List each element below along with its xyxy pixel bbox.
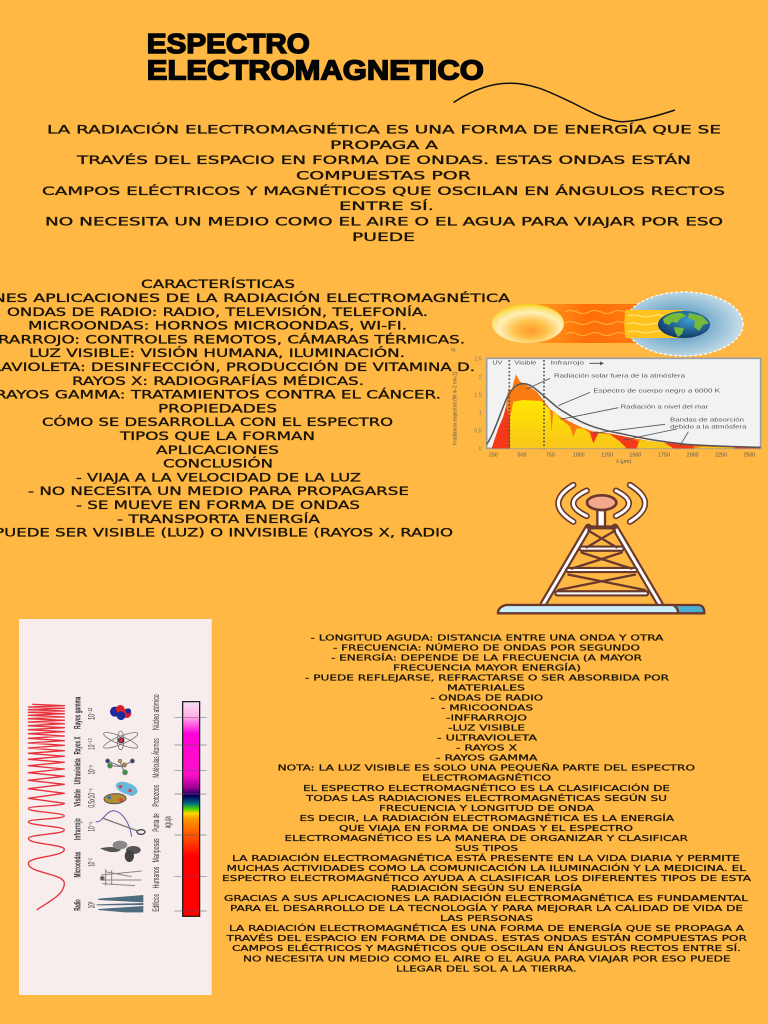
explanatory text block: QUE VIAJA EN FORMA DE ONDAS Y EL ESPECTRO	[339, 823, 633, 833]
decorative wave line under title	[454, 83, 675, 122]
explanatory text block: CAMPOS ELÉCTRICOS Y MAGNÉTICOS QUE OSCILAN EN ÁNGULOS RECTOS ENTRE SÍ.	[232, 942, 741, 953]
explanatory text block: MATERIALES	[447, 682, 525, 692]
explanatory text block: -LUZ VISIBLE	[448, 723, 525, 733]
wavelength values: 0,5x10⁻⁶	[86, 788, 96, 808]
explanatory text block: NOTA: LA LUZ VISIBLE ES SOLO UNA PEQUEÑA PARTE DEL ESPECTRO	[278, 763, 695, 773]
chart: solar irradiance spectrum: 1500	[629, 452, 641, 458]
chart: solar irradiance spectrum: 250	[489, 452, 498, 458]
intro text block	[42, 123, 725, 244]
chart: solar irradiance spectrum: 1	[479, 410, 482, 416]
icon: butterfly	[100, 841, 141, 862]
black body curve	[487, 384, 761, 447]
wavelength values: 10⁻¹²	[86, 708, 96, 720]
size comparison labels: Mariposas	[151, 838, 161, 862]
red absorption areas	[492, 407, 760, 448]
characteristics text block: RAYOS X: RADIOGRAFÍAS MÉDICAS.	[72, 373, 364, 388]
intro text block: PROPAGA A	[330, 139, 439, 152]
explanatory text block: TODAS LAS RADIACIONES ELECTROMAGNÉTICAS SEGÚN SU	[305, 792, 667, 803]
band names	[73, 696, 83, 911]
explanatory text block: - RAYOS X	[456, 743, 518, 753]
icon: needle tip	[96, 811, 145, 837]
chart: solar irradiance spectrum: λ (μm)	[616, 459, 631, 465]
size comparison labels: Átomos	[151, 738, 161, 755]
explanatory text block: - ENERGÍA: DEPENDE DE LA FRECUENCIA (A MAYOR	[331, 651, 642, 662]
base platform	[498, 605, 704, 613]
explanatory text block: LA RADIACIÓN ELECTROMAGNÉTICA ESTÁ PRESENTE EN LA VIDA DIARIA Y PERMITE	[232, 852, 740, 863]
explanatory text block: -INFRARROJO	[446, 713, 527, 723]
chart: solar irradiance spectrum: 1.5	[474, 392, 482, 398]
characteristics text block: RAYOS GAMMA: TRATAMIENTOS CONTRA EL CÁNCER.	[0, 387, 441, 402]
intro text block: ENTRE SÍ.	[339, 200, 434, 213]
size comparison labels: Edificios	[151, 894, 161, 912]
characteristics text block	[0, 276, 510, 540]
chart: solar irradiance spectrum: 1250	[601, 452, 613, 458]
chart: solar irradiance spectrum: 1000	[573, 452, 585, 458]
explanatory text block: - ULTRAVIOLETA	[437, 733, 538, 743]
intro text block: TRAVÉS DEL ESPACIO EN FORMA DE ONDAS. ESTAS ONDAS ESTÁN	[75, 154, 691, 167]
chart: solar irradiance spectrum: 750	[546, 452, 555, 458]
characteristics text block: PROPIEDADES	[158, 401, 277, 415]
characteristics text block: - NO NECESITA UN MEDIO PARA PROPAGARSE	[28, 484, 409, 498]
explanatory text block: ES DECIR, LA RADIACIÓN ELECTROMAGNÉTICA ES LA ENERGÍA	[300, 812, 675, 823]
icon: atom	[102, 730, 139, 751]
explanatory text block: - ONDAS DE RADIO	[430, 692, 543, 702]
intro text block: CAMPOS ELÉCTRICOS Y MAGNÉTICOS QUE OSCILAN EN ÁNGULOS RECTOS	[42, 185, 725, 198]
chart: solar irradiance spectrum: 1750	[658, 452, 670, 458]
explanatory text block: FRECUENCIA Y LONGITUD DE ONDA	[379, 803, 595, 813]
explanatory text block: PARA EL DESARROLLO DE LA TECNOLOGÍA Y PARA MEJORAR LA CALIDAD DE VIDA DE	[230, 902, 743, 913]
size comparison labels: Moléculas	[151, 756, 161, 778]
wavelength values: 10⁻⁵	[86, 822, 96, 832]
explanatory text block: - RAYOS GAMMA	[436, 753, 538, 763]
characteristics text block: LUZ VISIBLE: VISIÓN HUMANA, ILUMINACIÓN.	[29, 345, 405, 360]
outside atmosphere orange area	[492, 374, 761, 448]
explanatory text block: TRAVÉS DEL ESPACIO EN FORMA DE ONDAS. ESTAS ONDAS ESTÁN COMPUESTAS POR	[225, 932, 747, 943]
icon: humans	[100, 869, 142, 886]
chart: solar irradiance spectrum: Visible	[514, 360, 536, 366]
characteristics text block: CARACTERÍSTICAS	[141, 276, 295, 291]
wavelength values	[86, 708, 96, 908]
explanatory text block: ELECTROMAGNÉTICO	[422, 772, 551, 783]
explanatory text block: FRECUENCIA MAYOR ENERGÍA)	[393, 661, 581, 672]
explanatory text block: LLEGAR DEL SOL A LA TIERRA.	[396, 963, 576, 973]
intro text block: PUEDE	[352, 231, 415, 244]
intro text block: NO NECESITA UN MEDIO COMO EL AIRE O EL AGUA PARA VIAJAR POR ESO	[45, 216, 723, 229]
characteristics text block: APLICACIONES	[156, 443, 279, 457]
chart: solar irradiance spectrum: Espectro de cuerpo negro a 6000 K	[593, 388, 721, 394]
chart: solar irradiance spectrum: Irradiancia espectral (W m-2 nm-1)	[453, 371, 459, 445]
band names: Rayos gamma	[73, 696, 83, 729]
band names: Radio	[73, 899, 83, 911]
explanatory text block: ESPECTRO ELECTROMAGNÉTICO AYUDA A CLASIFICAR LOS DIFERENTES TIPOS DE ESTA	[222, 872, 752, 883]
chart: solar irradiance spectrum: debido a la atmósfera	[670, 424, 747, 430]
explanatory text block: SUS TIPOS	[455, 843, 518, 853]
chart: solar irradiance spectrum: 2250	[715, 452, 727, 458]
explanatory text block: - FRECUENCIA: NÚMERO DE ONDAS POR SEGUNDO	[333, 641, 640, 652]
size comparison labels: Protozoos	[151, 785, 161, 807]
chart: solar irradiance spectrum: UV	[492, 360, 503, 366]
chart: solar irradiance spectrum: 0.5	[474, 428, 482, 434]
explanatory text block: GRACIAS A SUS APLICACIONES LA RADIACIÓN ELECTROMAGNÉTICA ES FUNDAMENTAL	[224, 892, 749, 903]
explanatory text block: ELECTROMAGNÉTICO ES LA MANERA DE ORGANIZAR Y CLASIFICAR	[284, 832, 688, 843]
explanatory text block: NO NECESITA UN MEDIO COMO EL AIRE O EL AGUA PARA VIAJAR POR ESO PUEDE	[243, 953, 730, 963]
wavelength values: 10⁻²	[86, 858, 96, 867]
wavelength values: 10⁻⁸	[86, 765, 96, 774]
sea level yellow area	[510, 400, 733, 448]
chart: solar irradiance spectrum: 500	[518, 452, 526, 458]
characteristics text block: MICROONDAS: HORNOS MICROONDAS, WI-FI.	[28, 319, 407, 333]
chart: solar irradiance spectrum: 2.5	[474, 356, 482, 362]
intro text block: LA RADIACIÓN ELECTROMAGNÉTICA ES UNA FORMA DE ENERGÍA QUE SE	[47, 123, 721, 136]
colour scale bar	[174, 702, 207, 916]
chart: solar irradiance spectrum: 2500	[743, 452, 755, 458]
size comparison labels: Humanos	[151, 866, 161, 888]
explanatory text block: - MRICOONDAS	[441, 702, 533, 712]
explanatory text block: LA RADIACIÓN ELECTROMAGNÉTICA ES UNA FORMA DE ENERGÍA QUE SE PROPAGA A	[229, 922, 745, 933]
characteristics text block: - TRANSPORTA ENERGÍA	[117, 511, 320, 526]
icon: radio antenna tower	[498, 485, 704, 613]
explanatory text block: LAS PERSONAS	[440, 913, 533, 923]
intro text block: COMPUESTAS POR	[296, 170, 471, 183]
chart: solar irradiance spectrum: Radiación a nivel del mar	[621, 404, 709, 410]
explanatory text block: - LONGITUD AGUDA: DISTANCIA ENTRE UNA ONDA Y OTRA	[311, 632, 664, 642]
band names: Ultravioleta	[73, 758, 83, 784]
chart: solar irradiance spectrum	[451, 347, 761, 465]
wavelength values: 10³	[86, 902, 96, 908]
characteristics text block: TIPOS QUE LA FORMAN	[119, 429, 315, 443]
explanatory text block: MUCHAS ACTIVIDADES COMO LA COMUNICACIÓN LA ILUMINACIÓN Y LA MEDICINA. EL	[226, 862, 747, 873]
explanatory text block	[222, 632, 752, 973]
characteristics text block: CÓMO SE DESARROLLA CON EL ESPECTRO	[42, 414, 393, 429]
chart: solar irradiance spectrum: Radiación solar fuera de la atmósfera	[554, 374, 685, 380]
characteristics text block: CONCLUSIÓN	[163, 456, 273, 471]
chart: solar irradiance spectrum: 0	[479, 446, 482, 452]
icon: buildings	[97, 895, 143, 912]
wavelength values: 10⁻¹⁰	[86, 738, 96, 750]
panel: electromagnetic spectrum scale	[19, 619, 212, 995]
title: ESPECTRO	[147, 28, 310, 59]
size comparison labels	[151, 694, 172, 912]
mast	[597, 510, 605, 527]
chart: solar irradiance spectrum: Bandas de absorción	[670, 417, 744, 423]
band names: Microondas	[73, 852, 83, 877]
wave	[28, 704, 64, 910]
characteristics text block: - SE MUEVE EN FORMA DE ONDAS	[76, 498, 360, 512]
icon: molecule	[106, 759, 134, 775]
size comparison labels: Punta de	[151, 813, 161, 832]
title	[147, 28, 484, 86]
chart: solar irradiance spectrum: 2000	[687, 452, 699, 458]
size comparison labels: aguja	[162, 816, 172, 828]
characteristics text block: ONDAS DE RADIO: RADIO, TELEVISIÓN, TELEFONÍA.	[7, 304, 428, 319]
chart: solar irradiance spectrum: Infrarrojo	[551, 360, 584, 366]
size comparison labels: Núcleo atómico	[151, 694, 161, 730]
characteristics text block: - VIAJA A LA VELOCIDAD DE LA LUZ	[76, 470, 361, 484]
signal arcs	[558, 485, 645, 522]
band names: Rayos X	[73, 737, 83, 754]
icon: atomic nucleus	[110, 705, 131, 720]
icon: protozoa	[104, 779, 139, 804]
explanatory text block: RADIACIÓN SEGÚN SU ENERGÍA	[391, 882, 583, 893]
chart: solar irradiance spectrum: b)	[451, 347, 456, 352]
title: ELECTROMAGNETICO	[147, 54, 484, 86]
illustration: sun radiating to earth	[492, 292, 743, 356]
band names: Visible	[73, 789, 83, 807]
explanatory text block: EL ESPECTRO ELECTROMAGNÉTICO ES LA CLASIFICACIÓN DE	[303, 782, 670, 793]
explanatory text block: - PUEDE REFLEJARSE, REFRACTARSE O SER ABSORBIDA POR	[305, 672, 669, 682]
band names: Infrarrojo	[73, 818, 83, 840]
chart: solar irradiance spectrum: 2	[479, 374, 482, 380]
